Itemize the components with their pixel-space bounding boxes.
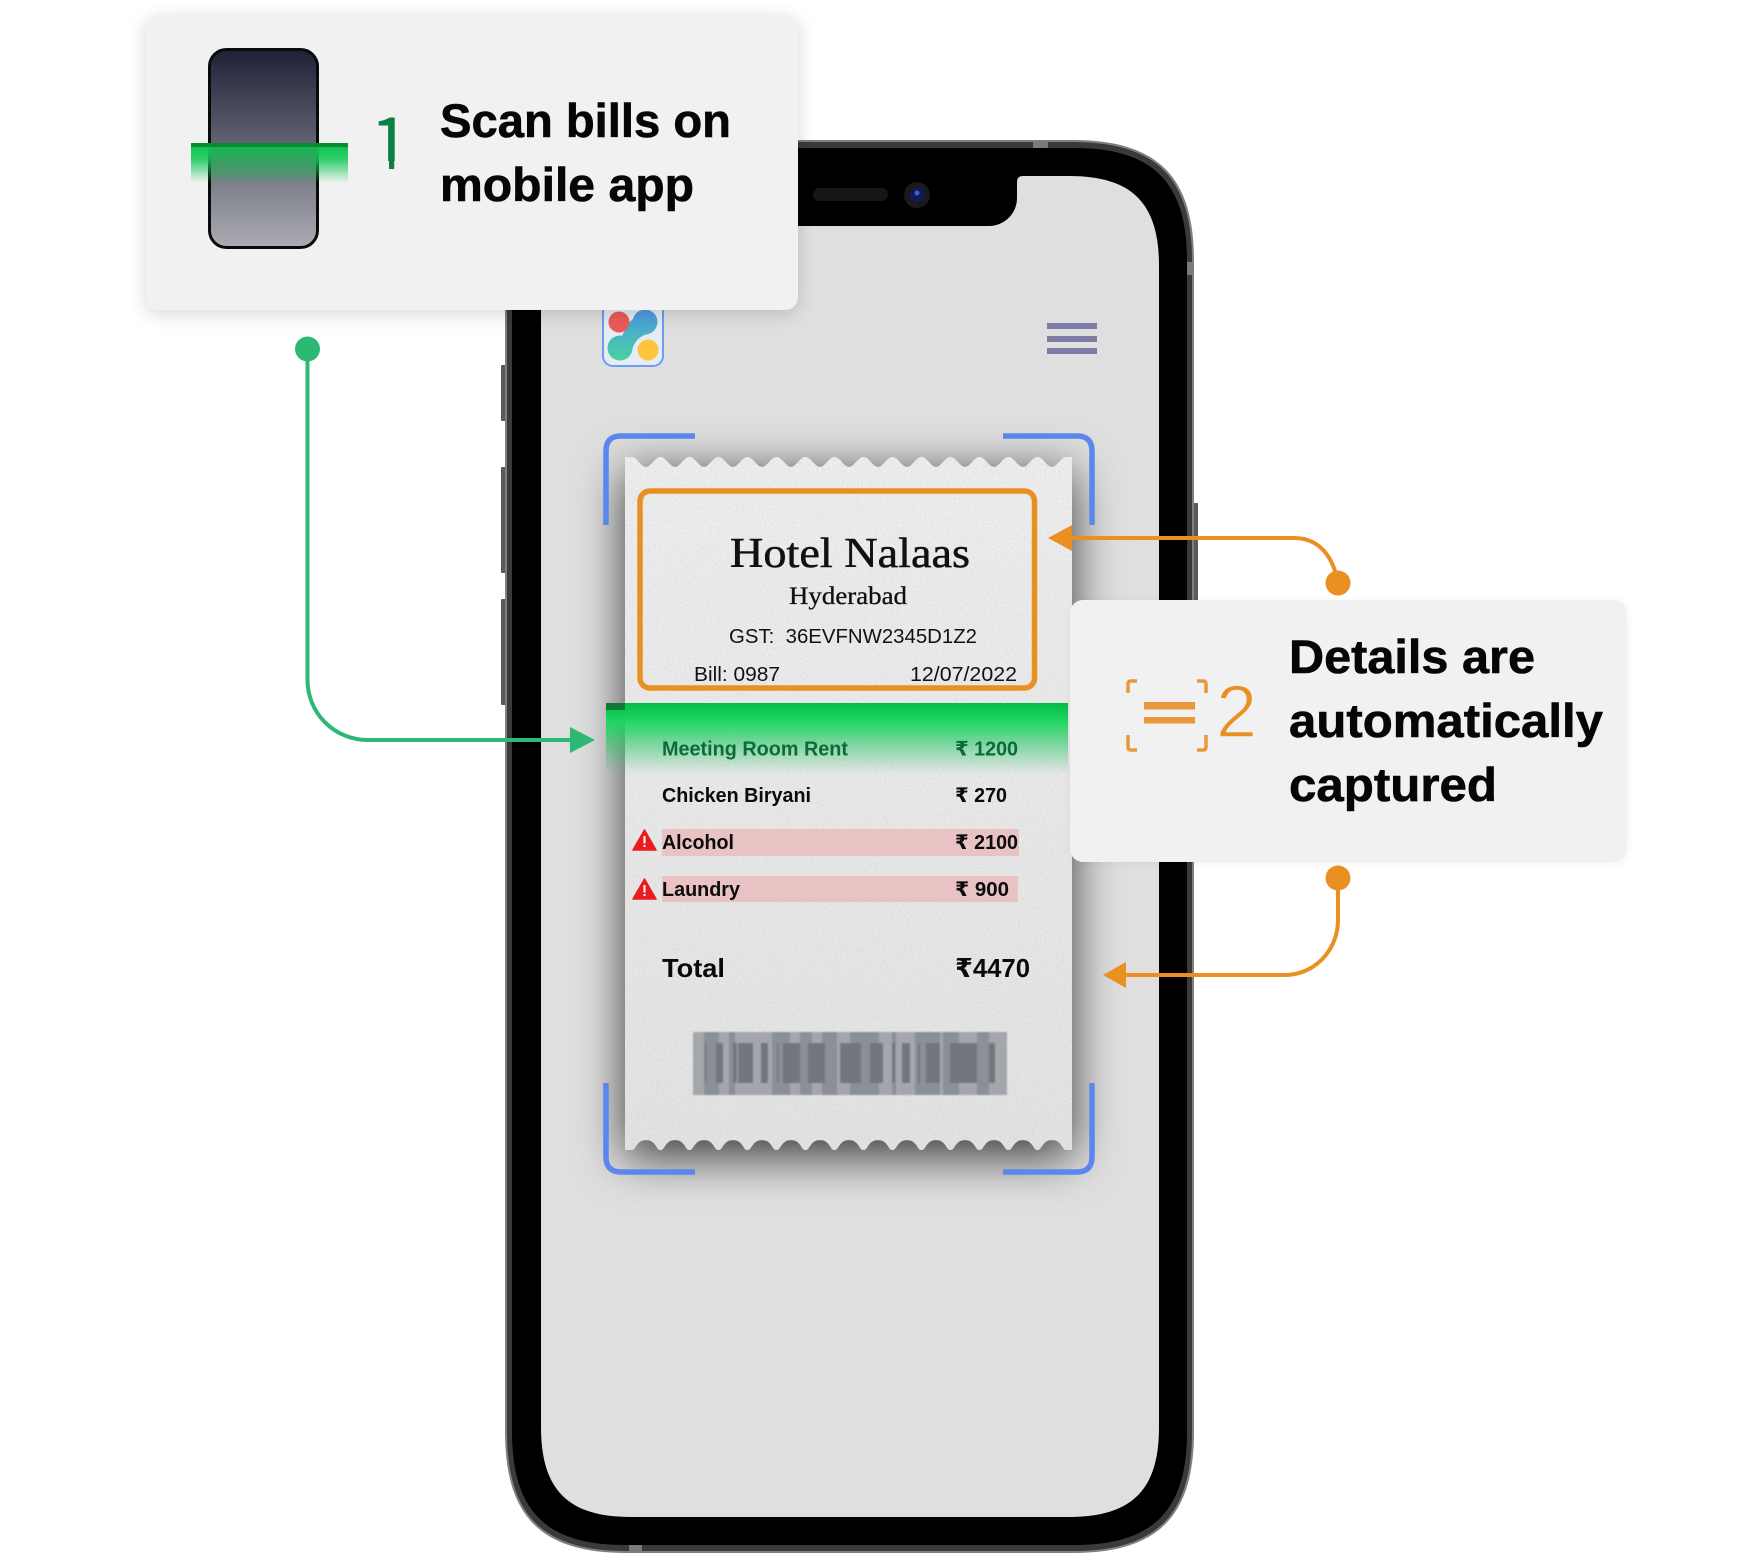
total row: ₹4470 — [955, 953, 1030, 983]
row: chicken biryani: ₹ 270 — [955, 785, 1007, 807]
row: meeting room rent: Meeting Room Rent — [662, 738, 848, 760]
step 1 caption: mobile app — [440, 158, 694, 211]
phone black bezel — [512, 148, 1187, 1545]
total row — [662, 953, 1030, 983]
camera — [904, 182, 930, 208]
icon: capture brackets — [1128, 681, 1206, 750]
arrow: orange connector to header box — [1048, 525, 1350, 596]
paper texture — [625, 457, 1072, 1150]
receipt paper — [625, 457, 1072, 1150]
row: chicken biryani: Chicken Biryani — [662, 785, 811, 807]
phone outer frame — [506, 141, 1193, 1552]
row: laundry flagged: ₹ 900 — [955, 879, 1009, 901]
total row: Total — [662, 953, 725, 983]
step number 2: 2 — [1216, 670, 1257, 753]
phone antenna bands — [629, 141, 1193, 1552]
GST number: GST: 36EVFNW2345D1Z2 — [729, 625, 977, 648]
row: meeting room rent — [662, 738, 1018, 760]
phone notch — [740, 170, 1023, 226]
phone side buttons — [501, 365, 1198, 705]
icon: hamburger menu — [1047, 323, 1097, 354]
bill number: Bill: 0987 — [694, 663, 780, 686]
step 2 caption: automatically — [1289, 694, 1603, 747]
row: chicken biryani — [662, 785, 1007, 807]
phone device — [501, 141, 1198, 1552]
row: alcohol flagged: ₹ 2100 — [955, 832, 1018, 854]
step 1 caption — [440, 94, 731, 211]
row: alcohol flagged: Alcohol — [662, 832, 734, 854]
phone screen — [541, 176, 1159, 1517]
hotel name: Hotel Nalaas — [730, 531, 970, 577]
step 1 caption: Scan bills on — [440, 94, 731, 147]
receipt — [625, 457, 1072, 1150]
panel: step 1 card — [146, 15, 798, 310]
step number 1: 1 — [370, 85, 410, 190]
arrow: orange connector to total — [1103, 866, 1350, 988]
panel: step 2 card — [1070, 600, 1627, 862]
scan frame brackets — [606, 436, 1092, 1172]
step 2 caption — [1289, 630, 1603, 811]
icon: app logo — [603, 300, 663, 366]
step 2 caption: captured — [1289, 758, 1497, 811]
green scan band — [606, 703, 1068, 774]
blurred barcode — [693, 1032, 1007, 1095]
step 2 caption: Details are — [1289, 630, 1535, 683]
city: Hyderabad — [789, 583, 908, 610]
arrow: green connector from step 1 to scan — [295, 336, 595, 753]
row: laundry flagged: Laundry — [662, 879, 741, 901]
row: alcohol flagged — [633, 829, 1019, 856]
row: meeting room rent: ₹ 1200 — [955, 738, 1018, 760]
bill date: 12/07/2022 — [910, 663, 1017, 686]
icon: phone being scanned — [191, 50, 348, 248]
row: laundry flagged — [633, 876, 1018, 902]
captured header highlight box — [640, 491, 1034, 688]
speaker — [813, 188, 888, 201]
